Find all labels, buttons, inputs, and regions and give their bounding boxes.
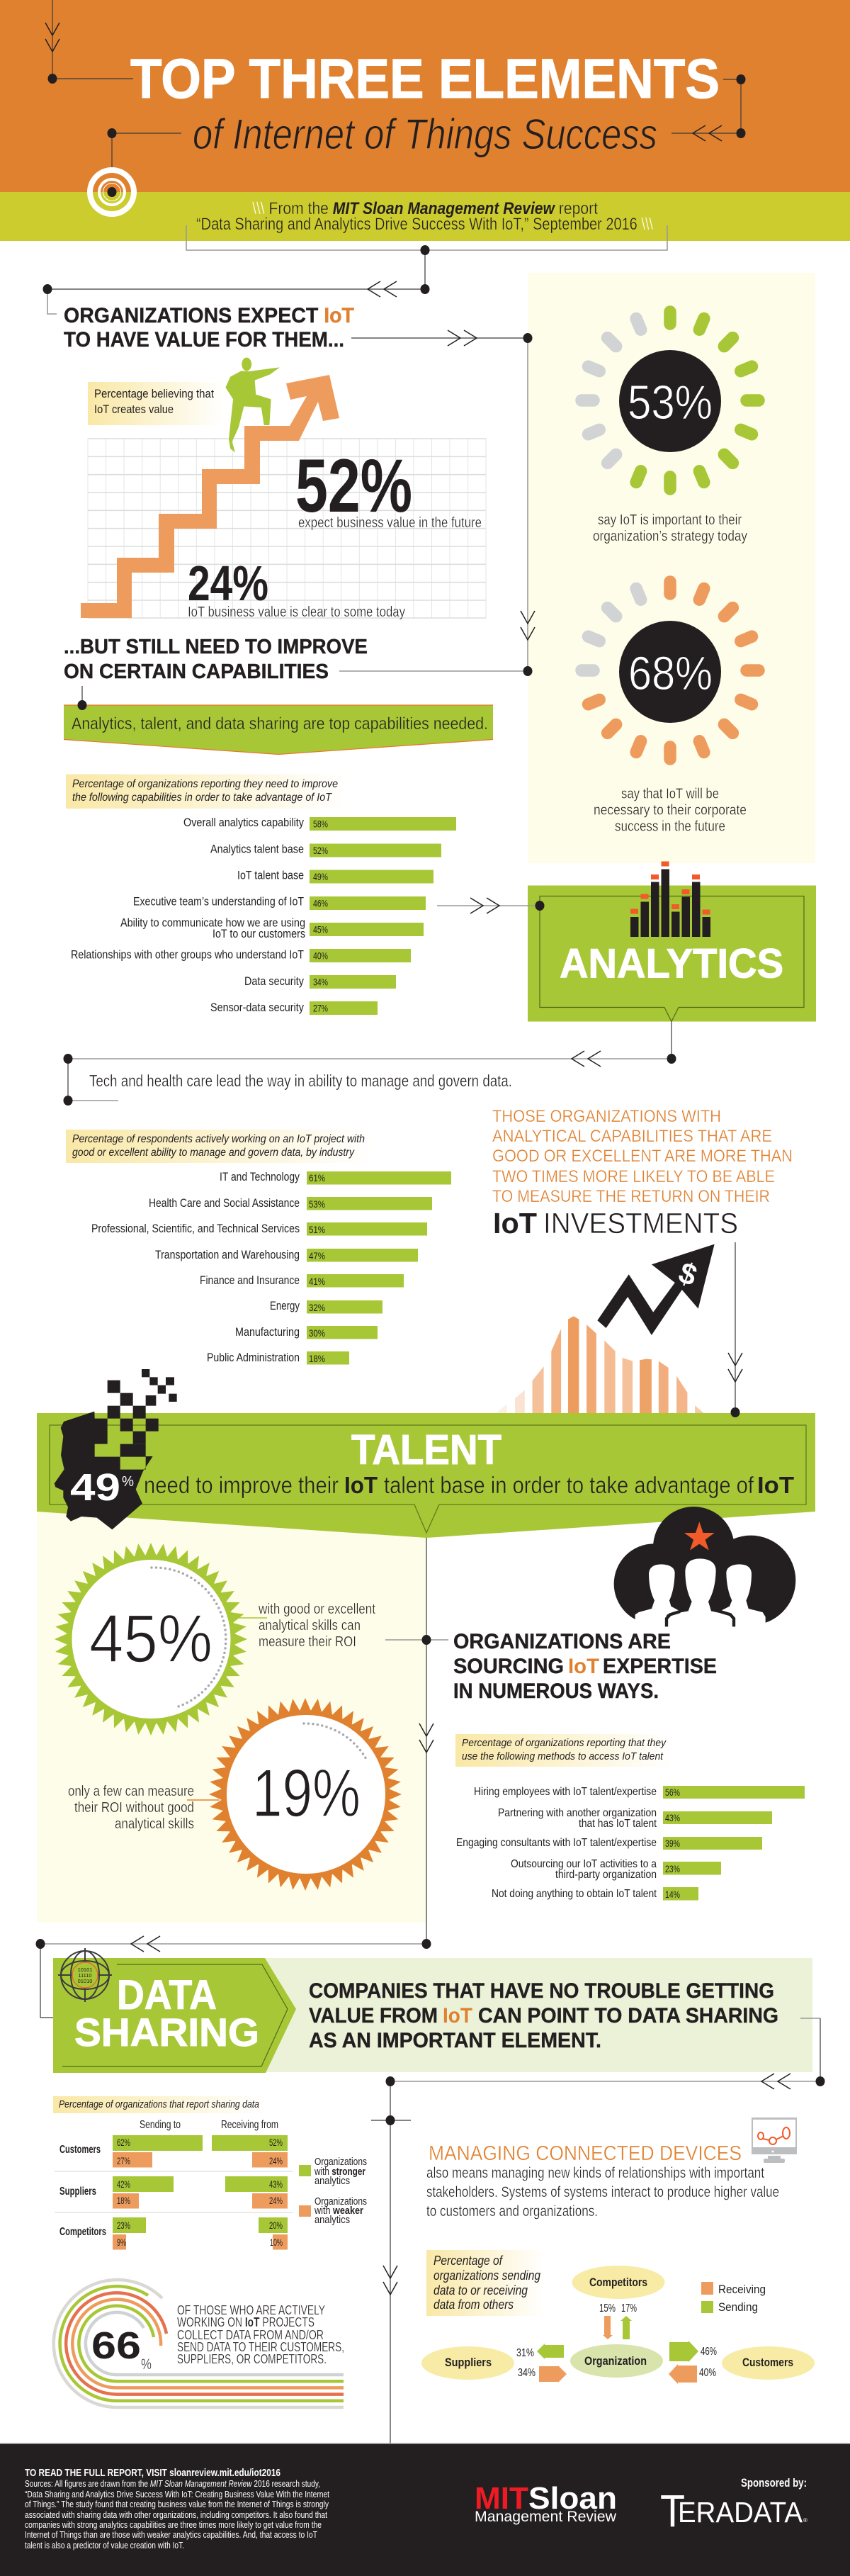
chart: 45 percent gear [47,1535,255,1743]
stat: 24 percent [188,556,405,620]
text: 49 percent need: need to improve their [144,1472,339,1498]
logo: MIT Sloan Management Review: MIT [475,2481,528,2516]
bar chart: sending and receiving: Suppliers [60,2186,96,2198]
text: 68 percent caption: necessary to their corporate [594,802,747,818]
legend: access IoT talent [455,1734,672,1767]
text: sources: companies with strong analytics capabilities are three times more likely to get value from the [25,2519,322,2530]
bar chart: sending and receiving: 62% [117,2137,130,2148]
icon: globe with binary [58,1948,112,2002]
heading: sourcing IoT expertise: IoT [568,1655,599,1678]
bar chart: industry: IT and Technology [220,1170,300,1183]
bar chart: sending and receiving: 20% [269,2220,283,2231]
chart: 45 percent gear: 45% [89,1601,212,1677]
legend: sending or receiving: Percentage of [434,2254,504,2268]
panel: data sharing banner [53,1948,812,2073]
text: 53 percent caption: organization’s strategy today [593,529,747,544]
heading: companies that have no trouble: VALUE FROM [309,2004,438,2027]
labels: percentages [516,2302,717,2379]
logo: MIT Sloan Management Review [475,2481,617,2525]
logo: Teradata: ERADATA [678,2496,803,2529]
heading: but still need to improve: ON CERTAIN CAPABILITIES [64,660,329,683]
heading: companies that have no trouble: AS AN IMPORTANT ELEMENT. [309,2029,601,2052]
text: those actively working: COLLECT DATA FROM AND/OR [177,2328,324,2342]
legend: industry: Percentage of respondents actively working on an IoT project with [72,1133,365,1145]
chart: rising investment hump [496,1316,703,1413]
bar chart: access IoT talent: 56% [665,1787,680,1798]
heading: sourcing IoT expertise: SOURCING [453,1655,564,1678]
footer [0,2443,850,2576]
text: sources: talent is also a predictor of value creation with IoT. [25,2540,184,2550]
text: 68 percent caption [594,787,747,835]
legend: receiving and sending: Sending [718,2300,758,2314]
icon: black zigzag arrow with dollar [597,1244,715,1335]
chart: 53 percent sun [582,312,759,489]
connector: data sharing to lower section [371,2018,824,2443]
bar chart: access IoT talent: that has IoT talent [579,1818,657,1830]
heading: analytics: ANALYTICS [560,941,783,986]
stat: 24 percent: IoT business value is clear to some today [188,604,405,620]
bar chart: capabilities: 45% [313,924,328,935]
bar chart: access IoT talent: Partnering with another organization [498,1807,657,1819]
bar chart: industry: Professional, Scientific, and Technical Services [91,1222,300,1235]
bar chart: access IoT talent: Outsourcing our IoT activities to a [511,1858,657,1870]
legend: capabilities: the following capabilities in order to take advantage of IoT [72,792,332,804]
bar chart: industry: 30% [309,1327,325,1339]
connector: investments to talent [728,1242,742,1412]
text: 53 percent caption: say IoT is important to their [598,512,742,528]
text: sponsored by: Sponsored by: [741,2476,807,2490]
legend: access IoT talent: Percentage of organizations reporting that they [462,1737,667,1749]
bar chart: sending and receiving: Receiving from [221,2119,278,2131]
node: suppliers: Suppliers [445,2356,492,2369]
legend: sending or receiving: data to or receiving [434,2283,528,2297]
stat: 49 percent: % [122,1474,134,1490]
heading: sourcing IoT expertise: EXPERTISE [603,1655,717,1678]
bar chart: capabilities: IoT talent base [237,869,304,882]
text: 45 percent caption [239,1602,375,1650]
logo: Teradata: T [660,2485,685,2536]
labels: percentages: 40% [699,2367,716,2379]
logo: Teradata [660,2485,808,2536]
node: competitors: Competitors [589,2276,647,2289]
stat: 49 percent [70,1466,134,1509]
legend: report sharing data [53,2096,266,2113]
legend: stronger and weaker analytics: Organizations [314,2156,367,2168]
node: customers [722,2346,815,2380]
text: those actively working: SUPPLIERS, OR COMPETITORS. [177,2352,327,2366]
bar chart: access IoT talent: 14% [665,1889,680,1900]
arrow: capabilities to analytics [437,898,544,913]
bar chart: industry: Public Administration [207,1351,300,1364]
labels: percentages: 17% [621,2302,637,2315]
bar chart: capabilities: 49% [313,872,328,882]
heading: companies that have no trouble: COMPANIES THAT HAVE NO TROUBLE GETTING [309,1979,774,2003]
bar chart: capabilities: 27% [313,1003,328,1013]
connector: to right column [339,330,535,676]
stat: 24 percent: 24% [188,556,268,611]
heading: but still need to improve: ...BUT STILL NEED TO IMPROVE [64,636,368,658]
heading: organizations expect IoT: ORGANIZATIONS EXPECT IoT [64,304,354,327]
icon: bar chart [630,862,710,937]
legend: percentage believing: IoT creates value [94,403,174,416]
bar chart: industry: 51% [309,1224,325,1235]
text: 19 percent caption: only a few can measure [68,1784,194,1799]
text: 53 percent caption [593,512,747,544]
text: 49 percent need: IoT [344,1472,378,1498]
labels: percentages: 15% [599,2302,616,2315]
labels: percentages: 46% [701,2346,717,2358]
text: tech and health care: Tech and health care lead the way in ability to manage and govern data. [89,1072,512,1090]
bar chart: capabilities [71,816,456,1015]
panel: cream stats [528,273,815,863]
bar chart: capabilities: 46% [313,899,328,909]
labels: percentages: 34% [518,2367,536,2379]
bar chart: industry: Finance and Insurance [200,1273,300,1287]
legend: stronger and weaker analytics: analytics [314,2214,350,2226]
chart: 19 percent gear: 19% [252,1755,361,1831]
legend: capabilities: Percentage of organizations reporting they need to improve [72,778,338,790]
labels: percentages: 31% [516,2347,534,2359]
chart: 68 percent sun [582,582,759,759]
legend: stronger and weaker analytics [299,2156,367,2226]
bar chart: industry: 47% [309,1250,325,1261]
bar chart: capabilities: 58% [313,819,328,829]
panel: analytics [528,862,816,1022]
legend: stronger and weaker analytics: with weaker [314,2205,363,2217]
text: those actively working: SEND DATA TO THEIR CUSTOMERS, [177,2340,344,2354]
icon: black zigzag arrow with dollar: $ [674,1255,701,1293]
bar chart: industry: Energy [270,1299,300,1312]
logo: MIT Sloan Management Review: Sloan [528,2481,617,2516]
bar chart: industry: Manufacturing [235,1325,300,1339]
logo: Teradata: ® [803,2517,808,2524]
legend: percentage believing: Percentage believing that [94,387,214,400]
heading: organizations expect IoT: TO HAVE VALUE FOR THEM... [64,328,344,351]
heading: sourcing IoT expertise [453,1630,717,1703]
text: those actively working [177,2303,344,2366]
bar chart: capabilities: 40% [313,951,328,961]
text: 45 percent caption: with good or excellent [258,1602,375,1617]
bar chart: access IoT talent: Hiring employees with IoT talent/expertise [474,1786,657,1798]
text: 49 percent need: IoT [757,1472,794,1498]
legend: receiving and sending: Receiving [718,2283,766,2296]
report source line: \\\ From the MIT Sloan Management Review report [252,199,598,218]
report source line: “Data Sharing and Analytics Drive Success With IoT,” September 2016 \\\ [196,215,653,234]
text: managing connected devices: to customers and organizations. [426,2203,598,2220]
node: competitors [572,2266,664,2299]
bar chart: access IoT talent: 39% [665,1838,680,1849]
text: 19 percent caption: analytical skills [115,1816,194,1832]
text: 49 percent need [144,1472,794,1498]
legend: stronger and weaker analytics: Organizations [314,2195,367,2207]
chart: 66 percent rainbow: 66 [91,2324,141,2367]
text: 68 percent caption: say that IoT will be [621,787,719,802]
icon: globe with binary: 10101 [78,1967,92,1973]
text: 68 percent caption: success in the future [615,819,725,835]
heading: sourcing IoT expertise: IN NUMEROUS WAYS. [453,1680,659,1703]
bar chart: sending and receiving: 10% [270,2237,283,2248]
node: organization [570,2344,663,2378]
bar chart: capabilities: 52% [313,845,328,856]
text: analytical capabilities statement: TWO TIMES MORE LIKELY TO BE ABLE [492,1167,775,1186]
logo: MIT Sloan Management Review: Management Review [475,2509,617,2525]
bar chart: capabilities: Sensor-data security [210,1001,305,1014]
text: managing connected devices [426,2142,779,2220]
bar chart: sending and receiving: Competitors [60,2226,106,2238]
panel: talent banner [37,1407,815,1538]
legend: stronger and weaker analytics: with stronger [314,2166,366,2178]
heading: but still need to improve [64,636,368,683]
icon: target [87,167,137,217]
bar chart: sending and receiving: 18% [117,2195,130,2206]
legend: access IoT talent: use the following methods to access IoT talent [462,1750,664,1762]
node: customers: Customers [742,2356,793,2369]
icon: globe with binary: 01010 [78,1978,92,1984]
heading: companies that have no trouble [309,1979,778,2052]
legend: industry [66,1130,374,1163]
grid [88,438,486,618]
bar chart: sending and receiving: Customers [60,2144,101,2156]
bar chart: sending and receiving: 42% [117,2178,130,2190]
bar chart: sending and receiving: 24% [269,2155,283,2166]
icon: monitor [752,2117,797,2163]
node: organization: Organization [584,2354,647,2368]
node: suppliers [421,2346,514,2380]
text: sources [25,2467,329,2550]
text: analytical capabilities statement: INVESTMENTS [543,1207,738,1239]
chart: 53 percent sun: 53% [628,376,713,429]
panel: talent cream background [37,1509,426,1923]
text: sources: “Data Sharing and Analytics Drive Success With IoT: Creating Business Value With the Internet [25,2489,329,2499]
header panel [0,0,850,241]
subtitle: of Internet of Things Success [193,111,657,158]
legend: sending or receiving: data from others [434,2297,514,2312]
bar chart: capabilities: Relationships with other groups who understand IoT [71,948,304,961]
text: sources: Internet of Things than are those with weaker analytics capabilities. And, that access to IoT [25,2529,317,2540]
heading: data sharing [74,1972,259,2054]
text: sources: of Things.” The study found that creating business value from the Internet of Things is strongly [25,2499,329,2509]
text: analytical capabilities statement: GOOD OR EXCELLENT ARE MORE THAN [492,1147,793,1166]
text: those actively working: OF THOSE WHO ARE ACTIVELY [177,2303,325,2317]
heading: companies that have no trouble: IoT [443,2004,472,2027]
bar chart: industry: 18% [309,1353,325,1364]
bar chart: sending and receiving [55,2119,293,2249]
icon: globe with binary: 11110 [78,1972,92,1979]
bar chart: industry: 53% [309,1198,325,1210]
icon: three people with star [609,1507,798,1637]
bar chart: access IoT talent: 23% [665,1864,680,1874]
legend: industry: good or excellent ability to manage and govern data, by industry [72,1147,355,1159]
bar chart: access IoT talent: Engaging consultants with IoT talent/expertise [456,1837,657,1849]
heading: sourcing IoT expertise: ORGANIZATIONS ARE [453,1630,671,1653]
bar chart: capabilities: IoT to our customers [212,928,305,940]
text: 49 percent need: talent base in order to take advantage of [384,1472,754,1498]
heading: data sharing: SHARING [74,2010,259,2054]
bar chart: sending and receiving: 27% [117,2155,130,2166]
text: analytical capabilities statement [492,1107,793,1239]
legend: sending or receiving: organizations sending [434,2268,540,2283]
heading: companies that have no trouble: CAN POINT TO DATA SHARING [478,2004,778,2027]
text: 19 percent caption [68,1784,220,1832]
legend: sending or receiving [426,2250,545,2316]
bar chart: industry: Health Care and Social Assistance [149,1196,300,1210]
bar chart: industry: 41% [309,1276,325,1287]
text: those actively working: WORKING ON IoT PROJECTS [177,2315,314,2329]
connector: talent center line [35,1538,448,2018]
text: analytical capabilities statement: THOSE ORGANIZATIONS WITH [492,1107,721,1126]
bar chart: access IoT talent: Not doing anything to obtain IoT talent [492,1888,657,1900]
chart: 66 percent rainbow: % [141,2356,152,2373]
bar chart: industry: 32% [309,1302,325,1313]
text: managing connected devices: also means managing new kinds of relationships with important [426,2165,764,2181]
heading: talent: TALENT [351,1427,502,1473]
bar chart: industry: 61% [309,1172,325,1183]
stat: 49 percent: 49 [70,1466,120,1509]
text: 19 percent caption: their ROI without good [74,1800,194,1816]
connector: analytics to tech line [64,1022,676,1106]
legend: stronger and weaker analytics: analytics [314,2175,350,2187]
bar chart: capabilities: 34% [313,977,328,988]
text: sources: associated with sharing data with other organizations, including competitors. It also found that [25,2509,327,2520]
text: analytical capabilities statement: IoT [493,1207,537,1239]
text: analytical capabilities statement: TO MEASURE THE RETURN ON THEIR [492,1187,770,1206]
bar chart: sending and receiving: 43% [269,2178,283,2190]
bar chart: sending and receiving: 52% [269,2137,283,2148]
bar chart: access IoT talent [456,1786,805,1901]
bar chart: access IoT talent: third-party organization [555,1869,657,1881]
bar chart: access IoT talent: 43% [665,1813,680,1823]
heading: organizations expect IoT [64,304,354,351]
callout: top capabilities banner [64,686,493,754]
bar chart: capabilities: Ability to communicate how we are using [120,917,305,930]
bar chart: capabilities: Executive team’s understanding of IoT [133,896,304,909]
stairs arrow [81,375,339,618]
bar chart: capabilities: Data security [244,975,305,988]
heading: data sharing: DATA [117,1972,217,2018]
bar chart: industry [91,1170,451,1365]
bar chart: capabilities: Analytics talent base [210,843,304,856]
bar chart: sending and receiving: 9% [117,2237,126,2248]
report source line [196,199,653,234]
text: sources: Sources: All figures are drawn from the MIT Sloan Management Review 2016 research study, [25,2478,320,2489]
legend: report sharing data: Percentage of organizations that report sharing data [59,2098,259,2110]
chart: rising stairs [81,358,486,620]
legend: capabilities [66,774,347,809]
chart: data flow diagram [421,2266,815,2384]
chart: 68 percent sun: 68% [628,647,713,700]
icon: pixelated head [55,1369,177,1529]
legend: percentage believing [88,382,225,425]
stat: 52 percent: expect business value in the future [298,515,482,531]
text: managing connected devices: MANAGING CONNECTED DEVICES [429,2142,742,2165]
stat: 52 percent: 52% [295,443,412,528]
text: analytical capabilities statement: ANALYTICAL CAPABILITIES THAT ARE [492,1127,772,1146]
callout: top capabilities banner: Analytics, talent, and data sharing are top capabilities needed. [72,714,488,733]
bar chart: capabilities: Overall analytics capability [183,816,305,829]
text: 45 percent caption: measure their ROI [259,1634,356,1650]
bar chart: sending and receiving: 23% [117,2220,130,2231]
text: sources: TO READ THE FULL REPORT, VISIT sloanreview.mit.edu/iot2016 [25,2467,280,2479]
bar chart: industry: Transportation and Warehousing [155,1248,300,1261]
connector: report to organizations [42,225,667,314]
arrows: flow [537,2316,698,2384]
title: TOP THREE ELEMENTS [130,47,720,110]
icon: climbing figure [225,358,280,452]
chart: 66 percent rainbow [54,2280,344,2407]
legend: receiving and sending [701,2282,766,2314]
text: 45 percent caption: analytical skills can [259,1618,361,1633]
bar chart: sending and receiving: 24% [269,2195,283,2206]
chart: 19 percent gear [201,1690,409,1899]
bar chart: sending and receiving: Sending to [140,2119,181,2131]
